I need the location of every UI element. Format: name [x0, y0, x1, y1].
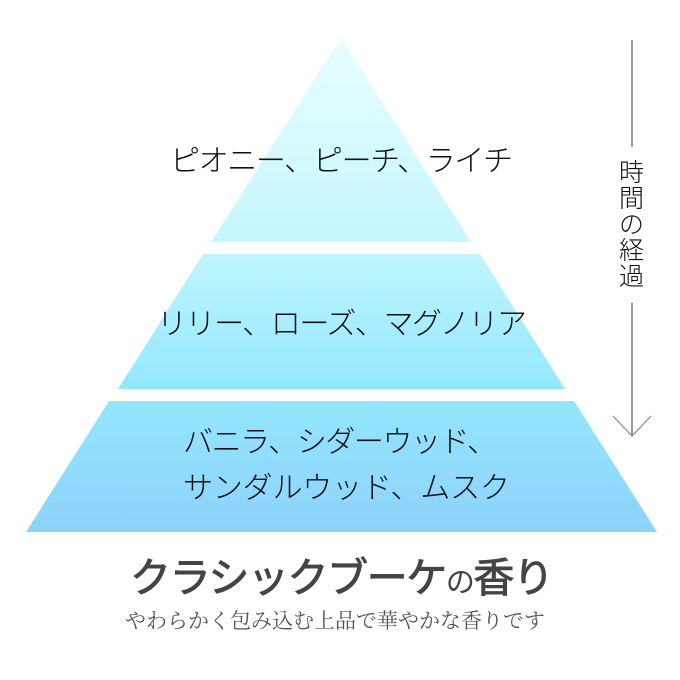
pyramid tier: base notes [26, 401, 657, 532]
text: top notes: ピオニー、ピーチ、ライチ [170, 145, 513, 178]
pyramid tier: middle notes [118, 254, 565, 389]
arrow: passage of time [613, 40, 651, 436]
label: passage of time: の [619, 211, 644, 239]
text: base notes line 1: バニラ、シダーウッド、 [183, 426, 497, 459]
label: passage of time: 間 [619, 185, 644, 213]
title: クラシックブーケの香り [130, 555, 554, 601]
subtitle: やわらかく包み込む上品で華やかな香りです [125, 609, 545, 633]
text: base notes line 2: サンダルウッド、ムスク [183, 472, 510, 505]
label: passage of time [619, 159, 644, 291]
text: middle notes: リリー、ローズ、マグノリア [157, 308, 527, 341]
label: passage of time: 時 [619, 159, 644, 187]
label: passage of time: 経 [619, 237, 644, 265]
pyramid tier: top notes [170, 38, 513, 242]
label: passage of time: 過 [619, 263, 644, 291]
